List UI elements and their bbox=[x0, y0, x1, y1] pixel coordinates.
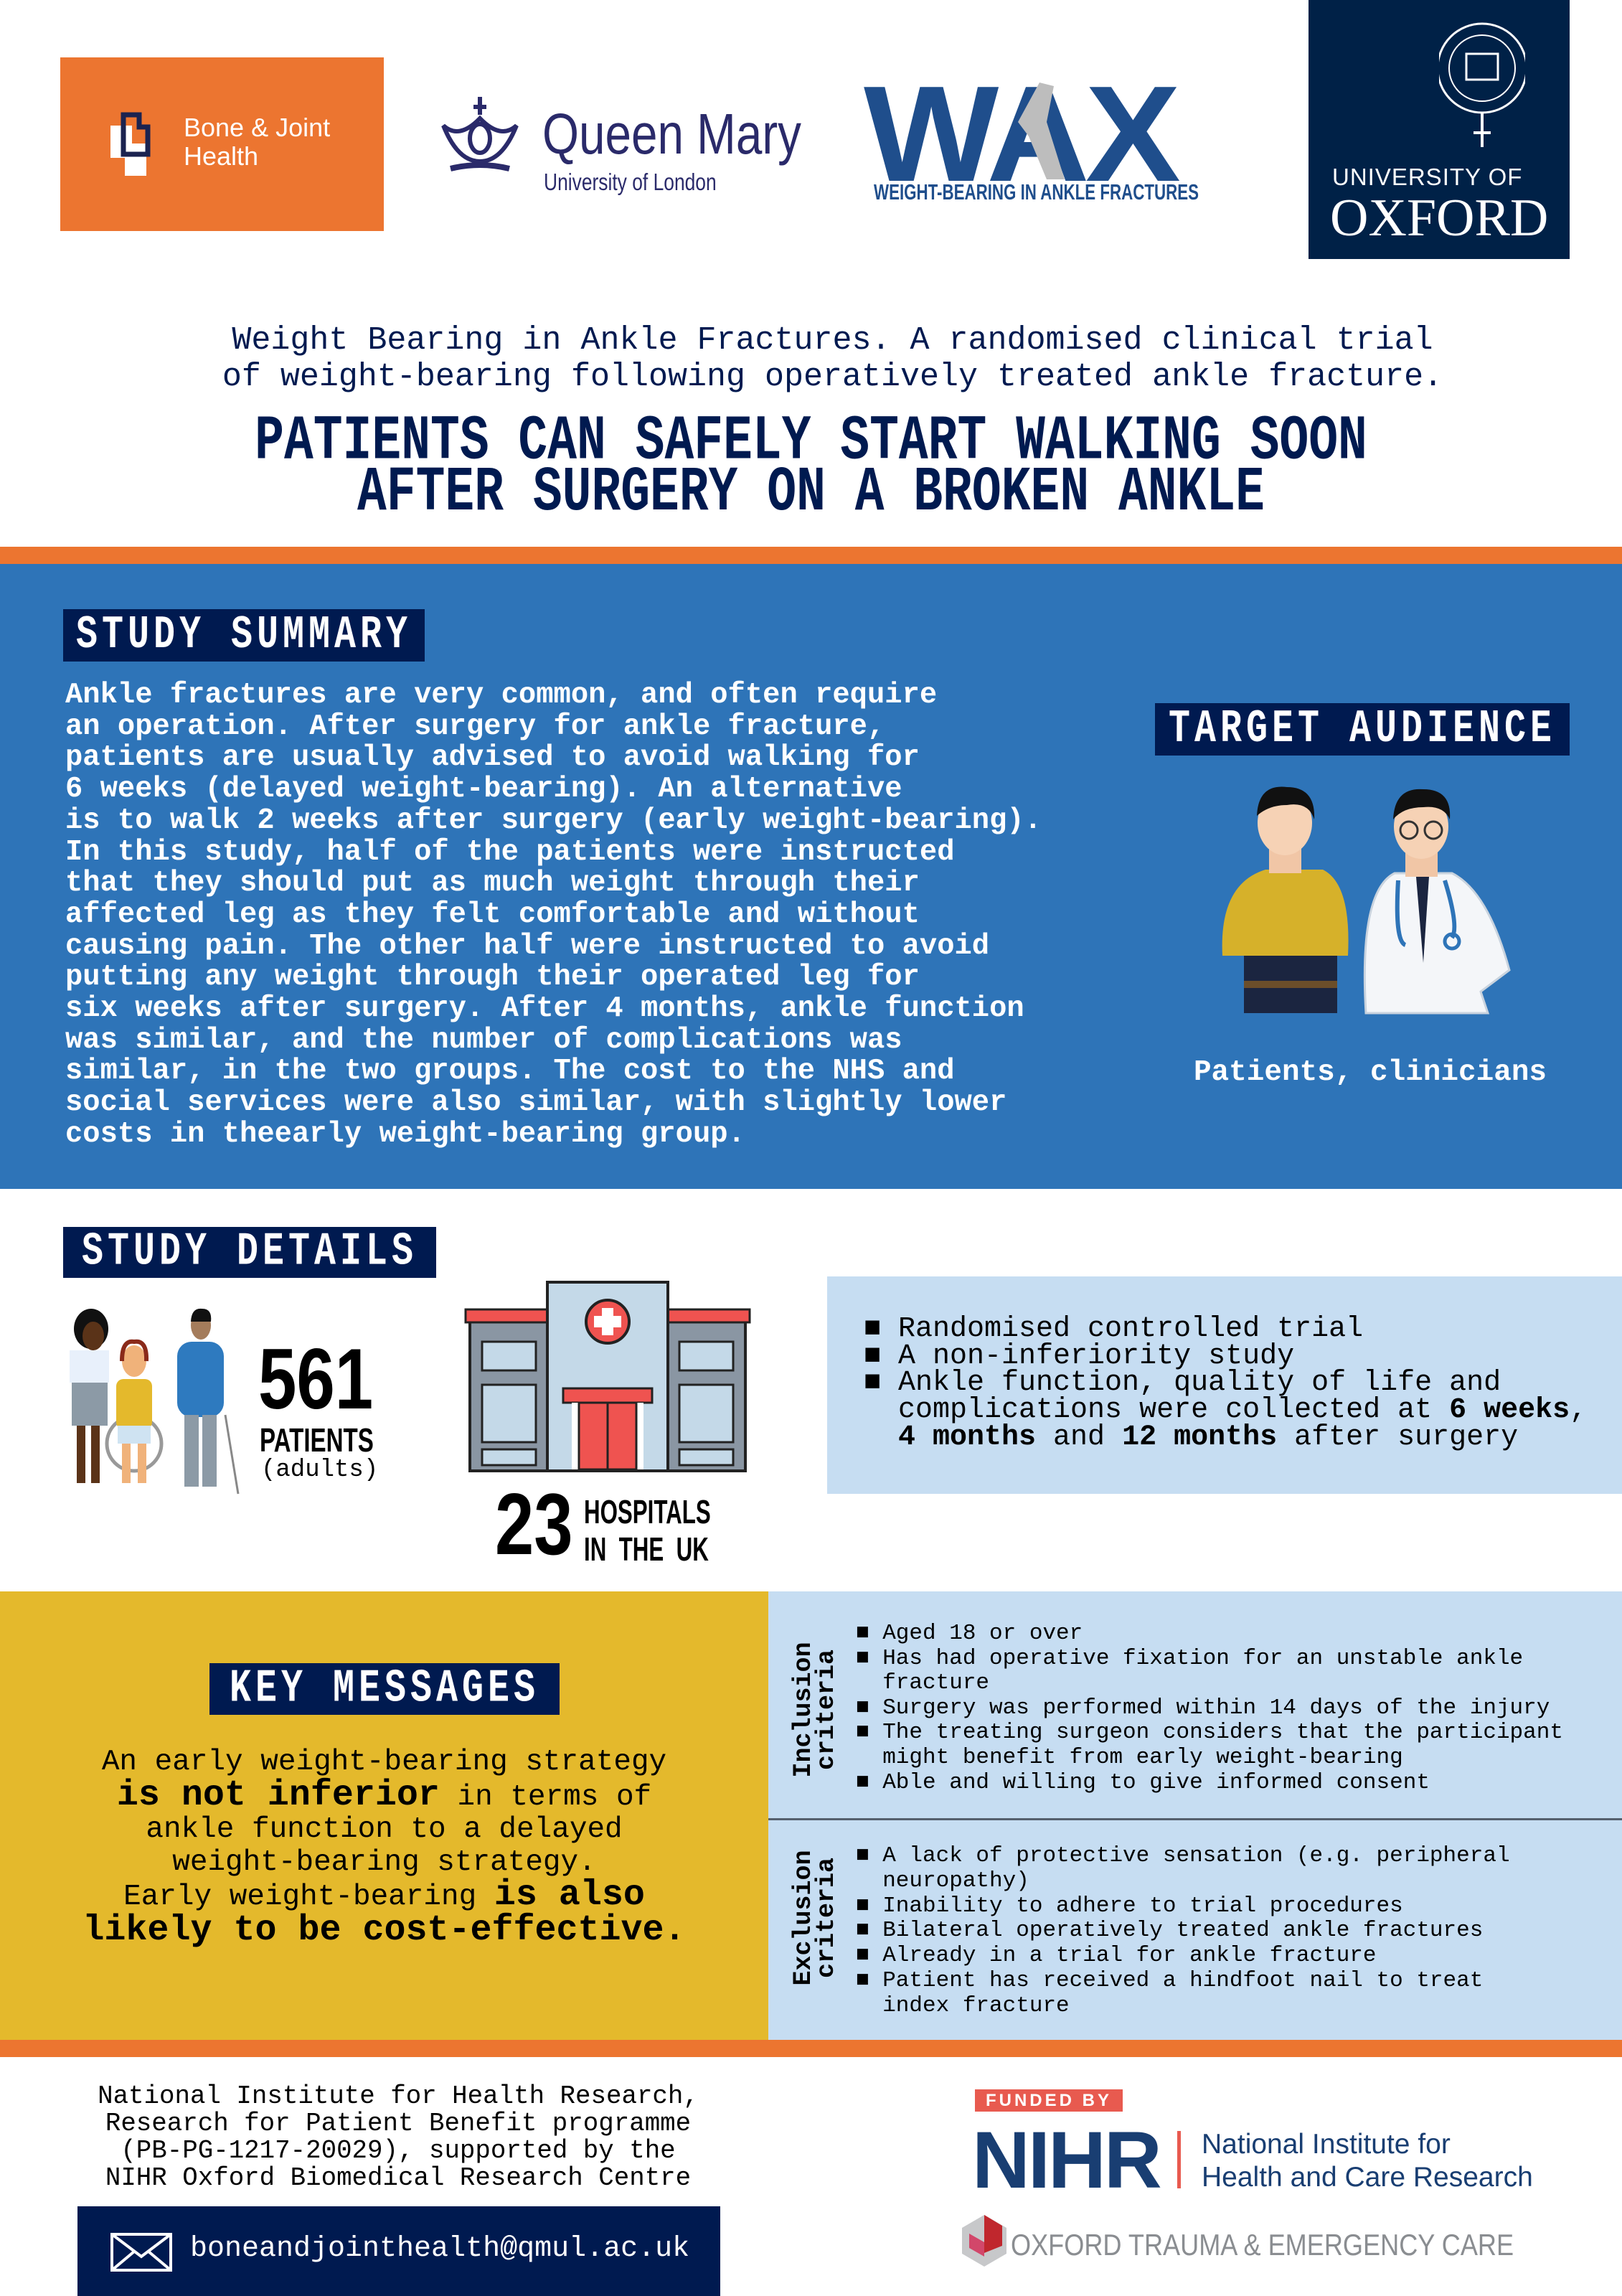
text block: key messages: is not inferior in terms of bbox=[117, 1775, 651, 1815]
badge: funded by: FUNDED BY bbox=[986, 2091, 1112, 2110]
logo: University of Oxford bbox=[1309, 0, 1570, 259]
label: exclusion criteria: Exclusion criteria bbox=[789, 1850, 841, 1986]
panel: eligibility criteria bbox=[768, 1591, 1622, 2040]
text block: summary: Ankle fractures are very common, and often require an operation. After surgery for ankle fracture, patients are usually advised to avoid walking for 6 weeks (delayed weight-bearing). An alternative is to walk 2 weeks after surgery (early weight-bearing). In this study, half of the patients were instructed that they should put as much weight through their affected leg as they felt comfortable and without causing pain. The other half were instructed to avoid putting any weight through their operated leg for six weeks after surgery. After 4 months, ankle function was similar, and the number of complications was similar, in the two groups. The cost to the NHS and social services were also similar, with slightly lower costs in theearly weight-bearing group. bbox=[65, 679, 1042, 1151]
text block: key messages bbox=[82, 1746, 686, 1950]
orange divider bbox=[0, 547, 1622, 564]
panel: study summary bbox=[0, 564, 1622, 1189]
text block: key messages: ankle function to a delayed bbox=[146, 1813, 623, 1846]
logo: NIHR: National Institute for Health and Care Research bbox=[1202, 2129, 1533, 2193]
text: University of London: University of London bbox=[544, 169, 717, 195]
icon: crest bbox=[1439, 23, 1525, 147]
logo: NIHR bbox=[972, 2115, 1533, 2205]
text: WEIGHT-BEARING IN ANKLE FRACTURES: WEIGHT-BEARING IN ANKLE FRACTURES bbox=[874, 179, 1199, 204]
heading: key messages: KEY MESSAGES bbox=[230, 1662, 539, 1716]
stat: 23 hospitals bbox=[495, 1475, 711, 1573]
contact: email bbox=[77, 2206, 720, 2296]
icon: patient and clinician bbox=[1222, 786, 1511, 1015]
text: Bone & Joint Health: Health bbox=[184, 141, 258, 171]
icon: crown bbox=[441, 97, 519, 171]
logo: University of Oxford: OXFORD bbox=[1330, 189, 1548, 248]
stat: 561 patients: PATIENTS bbox=[260, 1421, 374, 1459]
logo: WAX bbox=[864, 58, 1199, 210]
heading: target audience: TARGET AUDIENCE bbox=[1169, 702, 1556, 756]
logo: Queen Mary University of London bbox=[441, 97, 801, 195]
logo: NIHR: NIHR bbox=[972, 2115, 1160, 2205]
icon: hospital bbox=[465, 1281, 750, 1472]
subtitle: Weight Bearing in Ankle Fractures. A randomised clinical trial of weight-bearing following operatively treated ankle fracture. bbox=[222, 322, 1443, 395]
list: inclusion: ■ Aged 18 or over ■ Has had operative fixation for an unstable ankle fracture ■ Surgery was performed within 14 days of the injury ■ The treating surgeon considers that the participant might benefit from early weight-bearing ■ Able and willing to give informed consent bbox=[856, 1621, 1563, 1795]
orange divider bbox=[0, 2040, 1622, 2057]
text block: key messages: Early weight-bearing is also bbox=[123, 1875, 645, 1916]
text: Bone & Joint Health: Bone & Joint bbox=[184, 113, 330, 142]
stat: 561 patients: 561 bbox=[258, 1331, 373, 1427]
text: Bone & Joint Health bbox=[184, 113, 330, 171]
logo: Oxford Trauma & Emergency Care bbox=[962, 2215, 1514, 2267]
icon: patients group bbox=[70, 1309, 240, 1494]
text block: key messages: weight-bearing strategy. bbox=[172, 1845, 596, 1878]
text: email address: boneandjointhealth@qmul.ac.uk bbox=[190, 2233, 689, 2265]
title: PATIENTS CAN SAFELY START WALKING SOON AFTER SURGERY ON A BROKEN ANKLE bbox=[255, 406, 1367, 529]
text block: funding: National Institute for Health Research, Research for Patient Benefit programme (PB-PG-1217-20029), supported by the NIHR Oxford Biomedical Research Centre bbox=[98, 2081, 699, 2193]
text block: key messages: likely to be cost-effective. bbox=[82, 1910, 686, 1950]
panel: study design bbox=[827, 1276, 1622, 1494]
icon: ankle bones bbox=[1018, 83, 1065, 179]
icon: bone & joint mark bbox=[110, 112, 151, 176]
stat: 561 patients bbox=[258, 1331, 378, 1484]
list: exclusion: ■ A lack of protective sensation (e.g. peripheral neuropathy) ■ Inability to adhere to trial procedures ■ Bilateral operatively treated ankle fractures ■ Already in a trial for ankle fracture ■ Patient has received a hindfoot nail to treat index fracture bbox=[856, 1843, 1510, 2018]
text: UNIVERSITY OF OXFORD: UNIVERSITY OF bbox=[1332, 164, 1522, 190]
text: audience: Patients, clinicians bbox=[1194, 1056, 1547, 1089]
icon: envelope bbox=[110, 2233, 172, 2272]
text block: key messages: An early weight-bearing strategy bbox=[102, 1746, 666, 1779]
panel: key messages bbox=[0, 1591, 768, 2040]
logo: Bone & Joint Health bbox=[60, 57, 384, 231]
stat: 23 hospitals: HOSPITALS IN THE UK bbox=[584, 1493, 711, 1568]
logo: Oxford Trauma & Emergency Care: OXFORD TRAUMA & EMERGENCY CARE bbox=[1011, 2228, 1514, 2262]
stat: 561 patients: (adults) bbox=[261, 1457, 378, 1484]
list: design bullets: ■ Randomised controlled trial ■ A non-inferiority study ■ Ankle function, quality of life and complications were collected at 6 weeks, 4 months and 12 months after surgery bbox=[864, 1313, 1587, 1454]
label: inclusion criteria: Inclusion criteria bbox=[789, 1642, 841, 1778]
heading: study summary: STUDY SUMMARY bbox=[76, 608, 412, 662]
heading: study details: STUDY DETAILS bbox=[82, 1225, 418, 1279]
text: WAX: WAX bbox=[864, 58, 1177, 210]
stat: 23 hospitals: 23 bbox=[495, 1475, 573, 1573]
text: Queen Mary: Queen Mary bbox=[542, 102, 801, 166]
